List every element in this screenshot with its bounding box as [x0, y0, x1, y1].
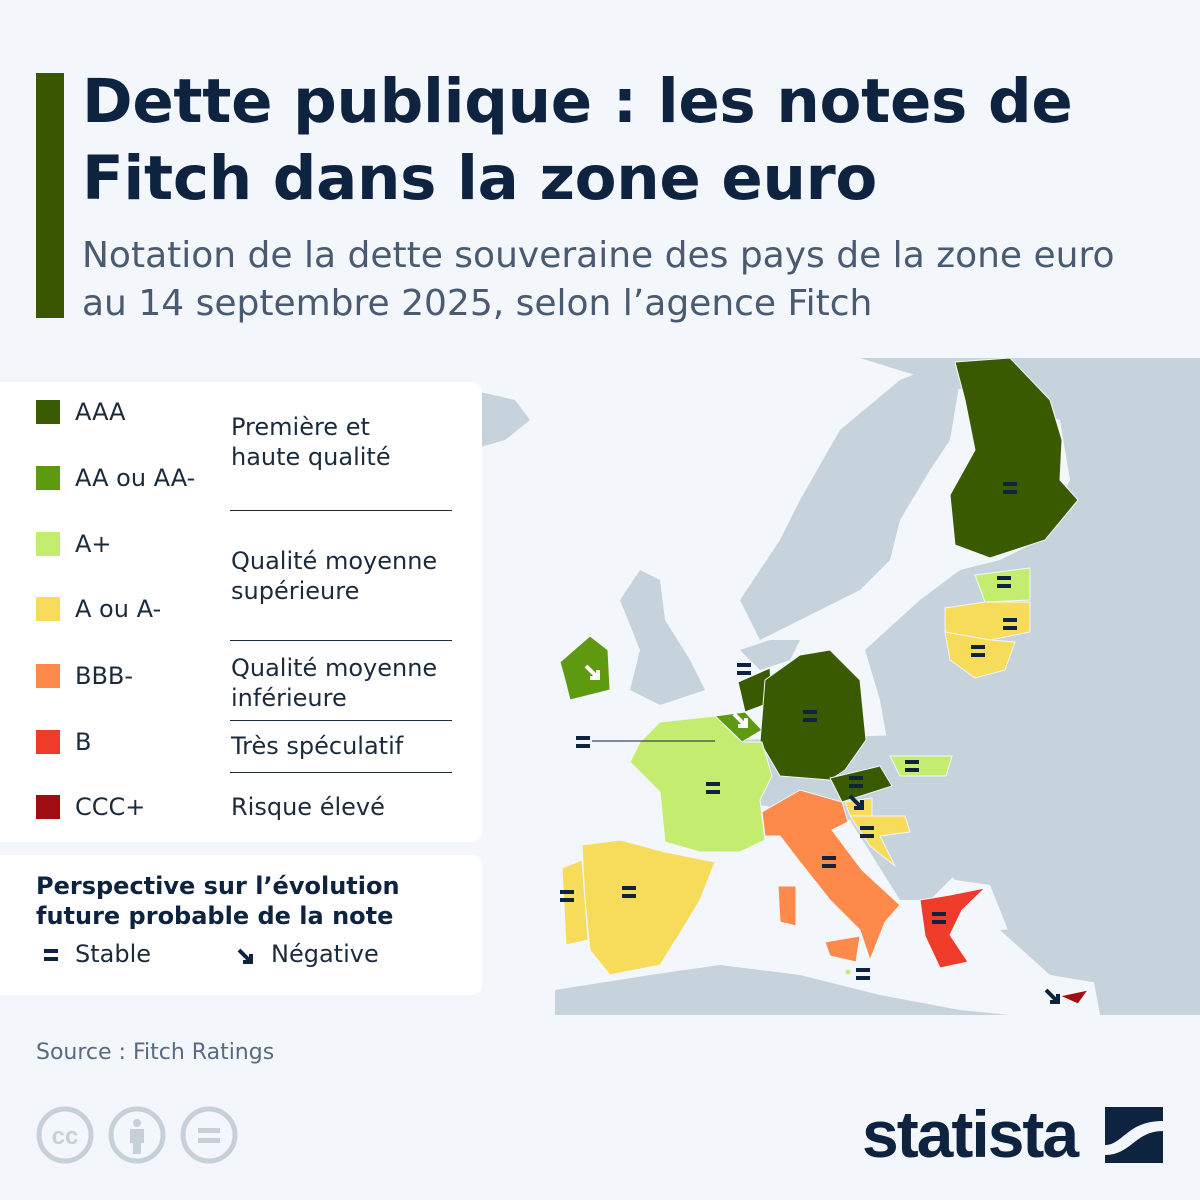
outlook markers	[560, 482, 1017, 980]
swatch AAA	[36, 400, 60, 424]
title	[82, 66, 1072, 214]
panel: legend ratings: Très spéculatif	[231, 732, 403, 760]
panel: legend ratings: Première et	[231, 413, 370, 441]
panel: outlook legend: Négative	[271, 940, 379, 968]
subtitle	[82, 235, 1115, 324]
icons: licence	[36, 1106, 238, 1164]
Ireland	[560, 636, 610, 700]
panel: legend ratings: haute qualité	[231, 443, 391, 471]
accent bar	[36, 73, 64, 318]
swatch A+	[36, 532, 60, 556]
icon: statista mark	[1105, 1107, 1163, 1163]
source: Source : Fitch Ratings	[36, 1040, 274, 1065]
background land	[555, 358, 1200, 1015]
panel: legend ratings	[0, 382, 482, 842]
icon: stable	[44, 949, 58, 961]
Slovenia	[845, 798, 872, 816]
Croatia	[850, 816, 910, 866]
swatch B	[36, 730, 60, 754]
icon: negative	[238, 948, 253, 964]
swatch AA	[36, 466, 60, 490]
Cyprus	[1060, 990, 1088, 1004]
title: Dette publique : les notes de	[82, 66, 1072, 137]
countries	[560, 358, 1088, 1004]
Finland	[950, 358, 1078, 558]
negative arrows	[586, 666, 1058, 1002]
panel: legend ratings: Qualité moyenne	[231, 547, 437, 575]
Italy	[762, 790, 900, 960]
Austria	[830, 766, 892, 802]
panel: legend ratings: Qualité moyenne	[231, 654, 437, 682]
panel: outlook legend: Perspective sur l’évolution	[36, 872, 400, 900]
panel: legend ratings: inférieure	[231, 684, 347, 712]
icons: licence: cc	[52, 1123, 78, 1150]
Germany	[760, 650, 866, 780]
panel: legend ratings: AA ou AA-	[75, 464, 195, 492]
subtitle: au 14 septembre 2025, selon l’agence Fitch	[82, 283, 872, 324]
panel: legend ratings: Risque élevé	[231, 793, 385, 821]
panel: outlook legend: Stable	[75, 940, 151, 968]
panel: legend ratings: CCC+	[75, 793, 145, 821]
panel: legend ratings: B	[75, 728, 91, 756]
logo: statista: statista	[862, 1097, 1077, 1171]
Sardinia	[778, 886, 796, 926]
panel: outlook legend	[0, 855, 482, 995]
panel: outlook legend: future probable de la note	[36, 902, 393, 930]
Spain	[582, 840, 715, 975]
swatch A	[36, 597, 60, 621]
map	[482, 358, 1200, 1015]
panel: legend ratings: supérieure	[231, 577, 359, 605]
Lithuania	[945, 632, 1015, 678]
Slovakia	[890, 756, 952, 776]
Belgium	[715, 712, 762, 742]
panel: legend ratings: BBB-	[75, 662, 133, 690]
Malta	[845, 969, 851, 975]
swatch CCC	[36, 795, 60, 819]
Sicily	[825, 936, 860, 962]
France	[630, 716, 772, 852]
Latvia	[945, 602, 1030, 640]
Portugal	[562, 860, 588, 945]
subtitle: Notation de la dette souveraine des pays de la zone euro	[82, 235, 1115, 276]
Estonia	[975, 568, 1030, 602]
icon: Iceland	[405, 392, 530, 450]
panel: legend ratings: AAA	[75, 398, 126, 426]
Greece	[920, 888, 985, 968]
panel: legend ratings: A ou A-	[75, 595, 161, 623]
swatch BBB	[36, 664, 60, 688]
panel: legend ratings: A+	[75, 530, 112, 558]
Netherlands	[738, 668, 772, 712]
title: Fitch dans la zone euro	[82, 143, 877, 214]
